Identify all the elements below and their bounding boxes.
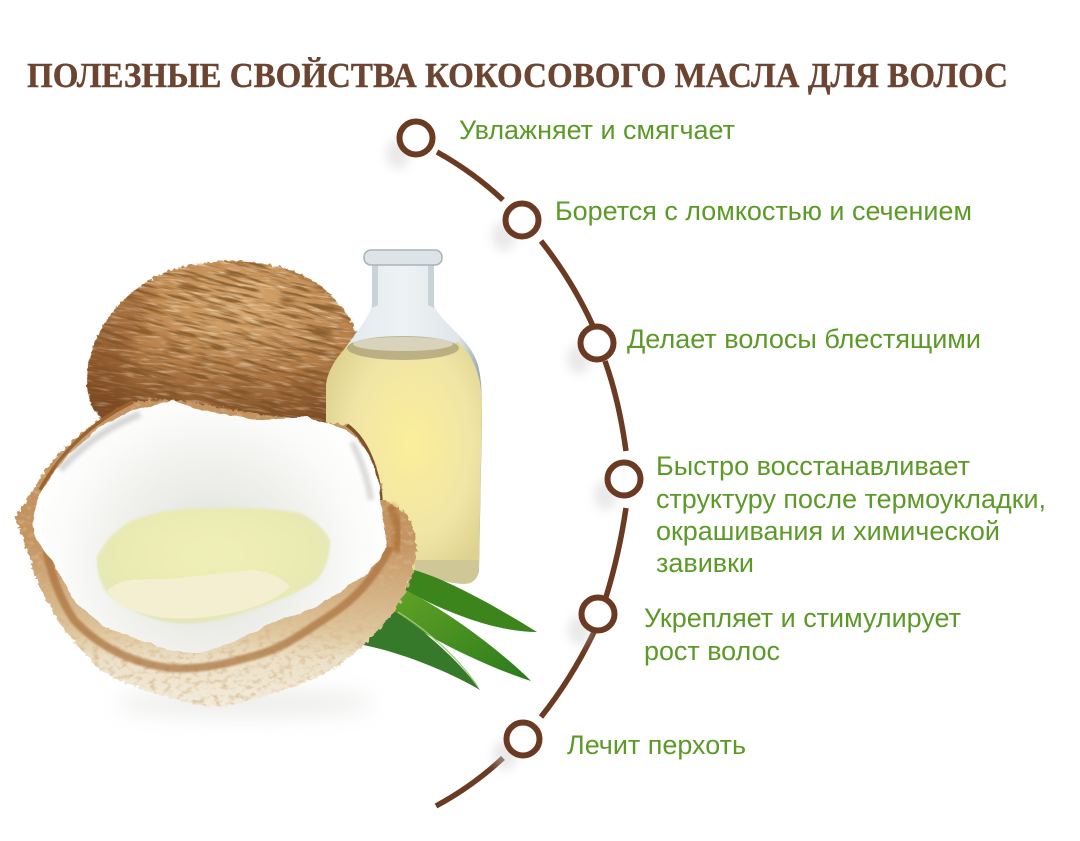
benefit 6: Лечит перхоть [567, 730, 746, 760]
coconut flesh [33, 400, 387, 653]
marker 4 [608, 462, 640, 496]
leaves [363, 570, 537, 690]
marker 2 [506, 204, 538, 236]
benefit 2: Борется с ломкостью и сечением [555, 196, 972, 226]
timeline arc [436, 152, 626, 806]
illustration: coconut, oil bottle, leaves [10, 195, 537, 717]
benefit 4 [656, 451, 1046, 578]
markers [386, 122, 640, 770]
marker 5 [582, 598, 614, 630]
benefit 3: Делает волосы блестящими [627, 324, 981, 354]
title: ПОЛЕЗНЫЕ СВОЙСТВА КОКОСОВОГО МАСЛА ДЛЯ ВОЛОС [27, 56, 1008, 95]
benefit 5: Укрепляет и стимулирует [644, 603, 961, 633]
marker 3 [580, 326, 614, 360]
husk rim line [46, 547, 390, 668]
whole coconut [86, 260, 358, 422]
benefit 5: рост волос [644, 636, 780, 666]
half coconut husk [10, 395, 420, 710]
solidified oil [107, 570, 290, 618]
benefit 5 [644, 603, 961, 666]
ground shadow [115, 689, 375, 717]
oil bottle [326, 250, 482, 584]
benefit 4: окрашивания и химической [656, 516, 1000, 546]
marker 1 [400, 122, 432, 154]
coconut oil pool [97, 508, 330, 623]
marker 6 [506, 722, 540, 756]
benefit 4: завивки [656, 548, 754, 578]
benefit 4: Быстро восстанавливает [656, 451, 970, 481]
benefit 1: Увлажняет и смягчает [459, 115, 735, 145]
benefit 4: структуру после термоукладки, [656, 484, 1046, 514]
